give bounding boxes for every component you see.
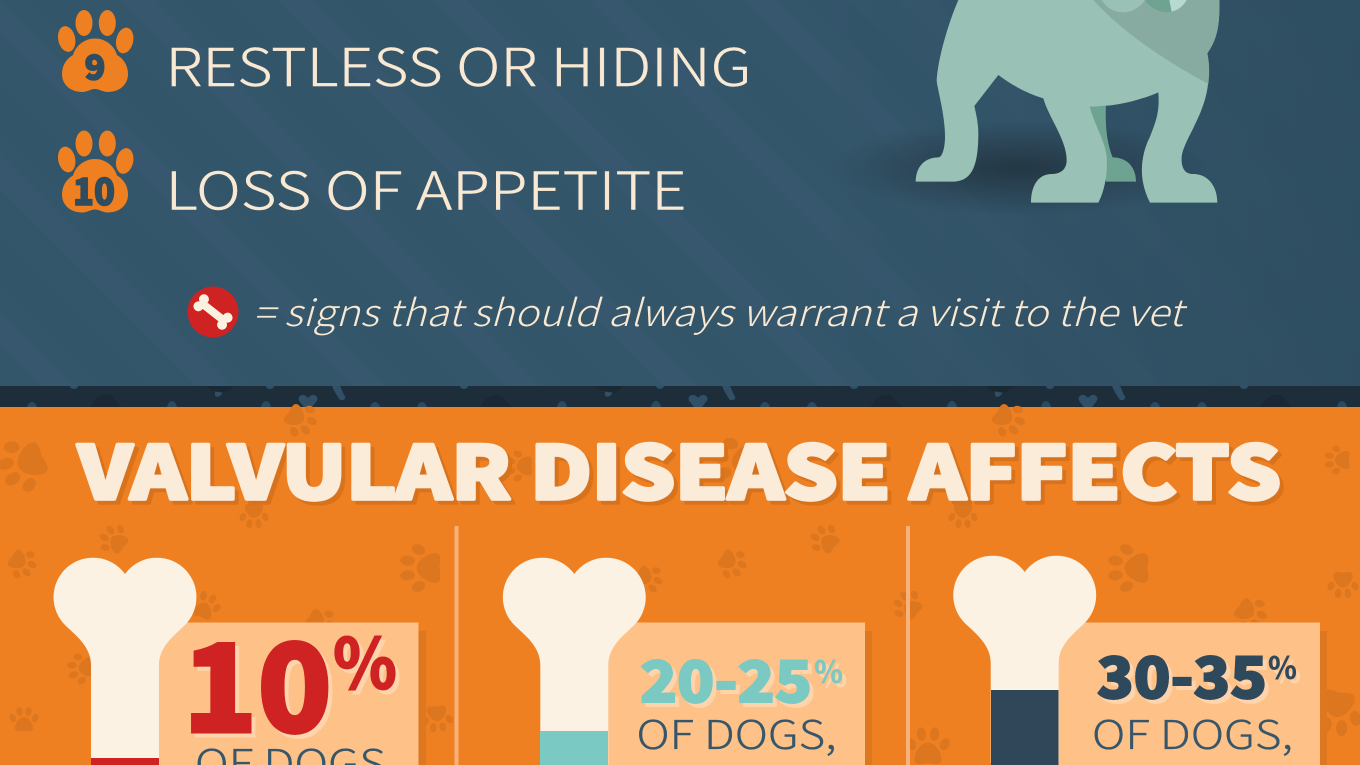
bone fill level: red (91, 758, 159, 765)
dog shadow (830, 120, 1210, 216)
panel: valvular disease (orange background) (0, 407, 1360, 765)
heading: sign 10: LOSS OF APPETITE (166, 150, 686, 224)
legend text: = signs that should always warrant a visit to the vet (253, 283, 1187, 337)
bone fill level: teal (540, 731, 608, 765)
panel: stat 20-25 percent (503, 558, 872, 765)
paw print pattern (0, 396, 1360, 764)
heading: sign 9: RESTLESS OR HIDING (166, 26, 752, 101)
panel: stat 10 percent (54, 558, 426, 765)
icon: red bone badge (188, 286, 238, 338)
stat percent sign: % (333, 609, 397, 710)
stat percent sign: % (814, 647, 843, 692)
stat number: 30-35: 30-35 (1097, 633, 1267, 715)
icon: paw number 10 (56, 130, 136, 216)
stat percent sign: % (1268, 643, 1297, 688)
title: VALVULAR DISEASE AFFECTS (77, 415, 1281, 521)
illustration: dog (916, 0, 1219, 203)
stat caption: OF DOGS, (636, 703, 836, 761)
panel: warning signs (blue background) (0, 0, 1360, 386)
dark band with bones (0, 386, 1360, 407)
panel: stat 30-35 percent (953, 556, 1327, 765)
bone fill level: navy (991, 690, 1058, 765)
stat number: 10: 10 (183, 591, 332, 765)
icon: paw number 9 (56, 10, 136, 92)
stat caption: OF DOGS, (1092, 703, 1293, 761)
stat number: 20-25: 20-25 (640, 637, 812, 719)
icon: paw number 9: 9 (85, 40, 105, 90)
icon: paw number 10: 10 (73, 162, 115, 216)
dividers (454, 526, 910, 765)
